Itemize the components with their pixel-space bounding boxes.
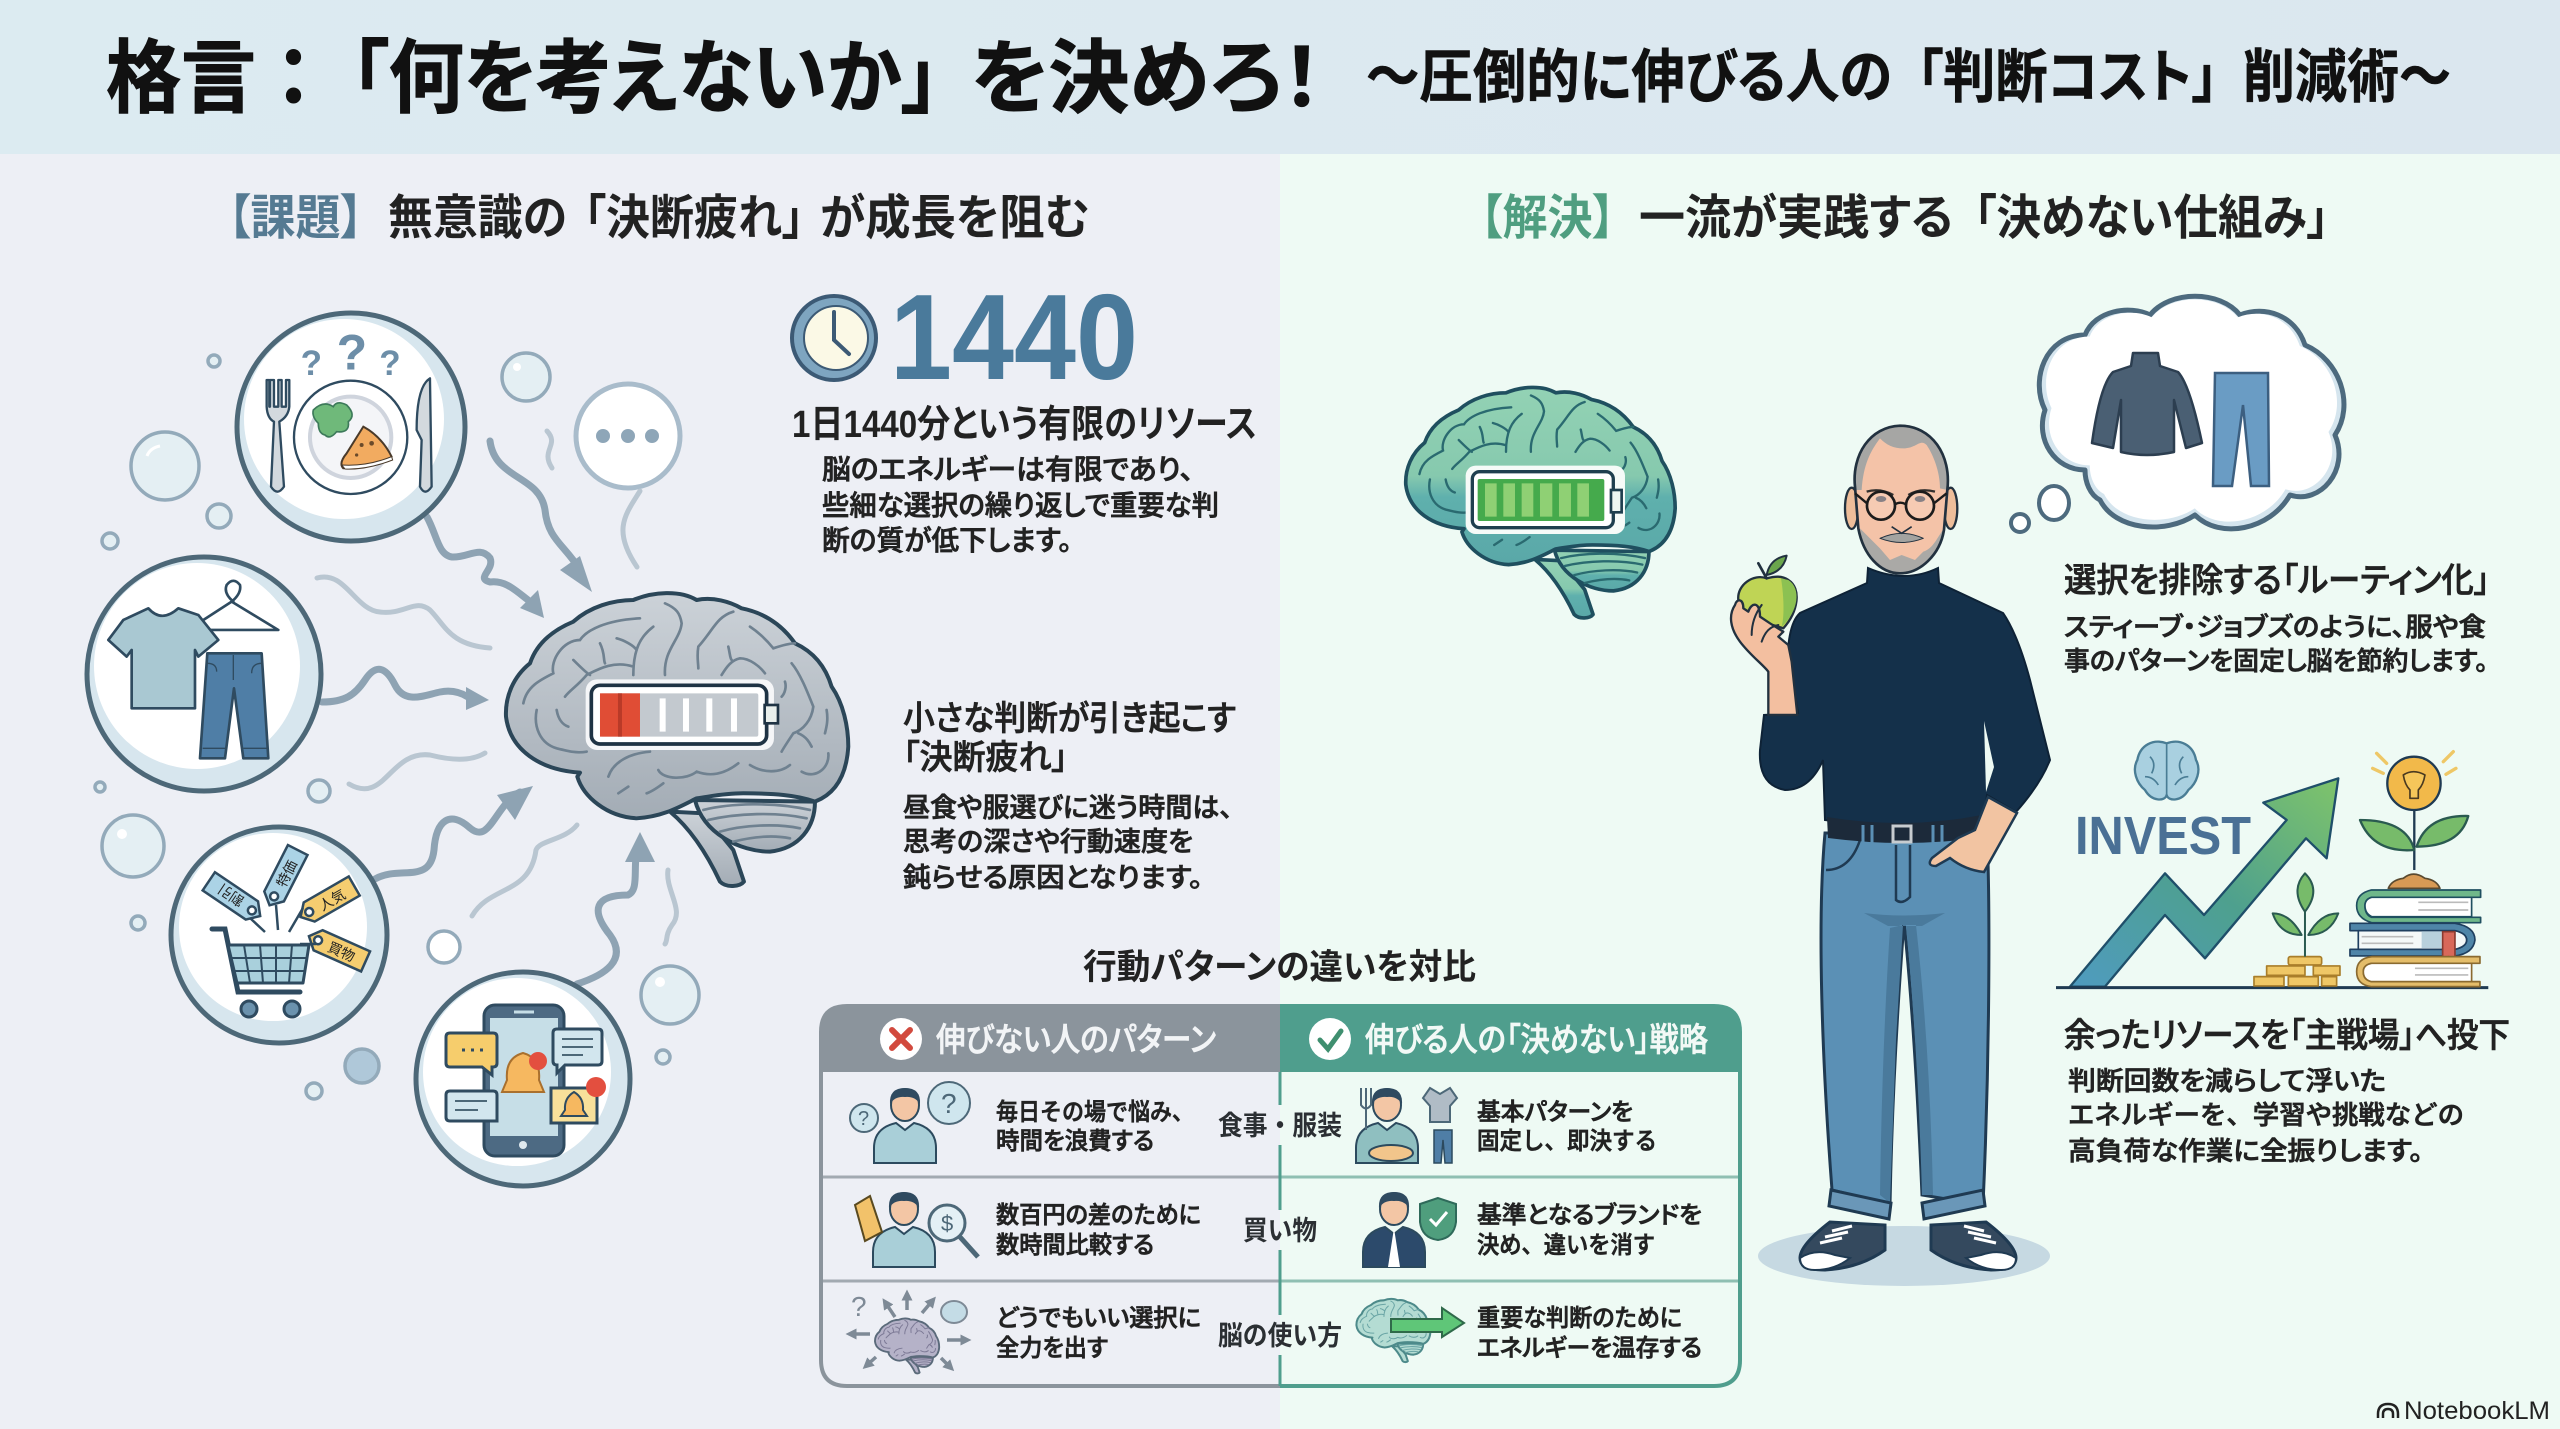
- icon circle: phone notifications: [416, 972, 630, 1186]
- row 1 left text: 時間を浪費する: [996, 1128, 1154, 1155]
- row 2 left text: [996, 1202, 1201, 1259]
- row 2 right text: 基準となるブランドを: [1477, 1201, 1702, 1229]
- subtitle: [1366, 45, 2451, 110]
- row 3 left icon: [850, 1291, 967, 1373]
- text block: decision fatigue: [903, 700, 1236, 893]
- shirt in cloud: [2092, 353, 2202, 455]
- row 2 left text: 数百円の差のために: [996, 1202, 1201, 1229]
- text block: decision fatigue: 思考の深さや行動速度を: [903, 827, 1193, 857]
- icon: charged brain with full battery: [1406, 387, 1675, 618]
- text block: invest resources: 高負荷な作業に全振りします。: [2068, 1136, 2423, 1166]
- section heading: solution: 【解決】: [1480, 192, 1615, 245]
- text block: routine: [2064, 562, 2490, 676]
- row 2 right icon: [1363, 1192, 1456, 1267]
- text block: decision fatigue: 小さな判断が引き起こす: [903, 700, 1236, 738]
- row 3 left text: [996, 1305, 1201, 1362]
- title: 「何を考えないか」: [351, 34, 939, 123]
- row 2 left icon: $: [941, 1211, 953, 1236]
- table header right: 伸びる人の「決めない」戦略: [1365, 1021, 1708, 1058]
- shoes: [1800, 1222, 1885, 1270]
- row 3 left text: どうでもいい選択に: [996, 1305, 1201, 1332]
- price tags: [203, 845, 370, 971]
- low battery: [586, 679, 778, 750]
- icon: tired brain with low battery: [506, 593, 848, 886]
- text block: decision fatigue: 昼食や服選びに迷う時間は、: [903, 793, 1233, 823]
- row labels: 買い物: [1243, 1216, 1317, 1246]
- thought cloud: [2011, 296, 2344, 532]
- decorative bubbles: [95, 353, 699, 1099]
- icon circle: shopping choice: [171, 827, 387, 1043]
- icon: clock: [792, 296, 876, 380]
- jeans in cloud: [2213, 373, 2269, 486]
- text block: limited resource: 脳のエネルギーは有限であり、: [822, 454, 1194, 485]
- small plant: [2273, 873, 2338, 957]
- header band: [0, 0, 2560, 154]
- section heading: problem: が成長を阻む: [820, 192, 1090, 245]
- section heading: problem: 「決断疲れ」: [584, 192, 804, 245]
- table header right: [1280, 1006, 1740, 1072]
- row 3 left icon: ?: [851, 1291, 867, 1322]
- row 1 left icon: ?: [858, 1108, 869, 1130]
- comparison table: [821, 1006, 1740, 1386]
- growth arrow: [2070, 778, 2338, 987]
- watermark: NotebookLM: [2404, 1397, 2550, 1425]
- flower with bulb: [2360, 752, 2468, 888]
- question marks: ?: [379, 344, 401, 383]
- section heading: problem: 無意識の: [388, 192, 567, 245]
- full battery: [1466, 466, 1625, 534]
- price tags: 買物: [325, 939, 357, 965]
- small brain: [2135, 742, 2198, 799]
- subtitle: 「判断コスト」: [1917, 45, 2218, 110]
- icon circle: meal choice: [237, 313, 465, 541]
- row 1 left icon: ?: [941, 1088, 957, 1119]
- jeans: [1821, 833, 1989, 1205]
- table title: 行動パターンの違いを対比: [1083, 948, 1476, 987]
- section heading: solution: [1480, 192, 2329, 245]
- price tags: 割引: [215, 881, 247, 910]
- right column frame: [1280, 1006, 1740, 1386]
- row 2 right text: [1477, 1201, 1702, 1259]
- price tags: 特価: [273, 858, 300, 890]
- text block: routine: 事のパターンを固定し脳を節約します。: [2064, 646, 2488, 676]
- text block: decision fatigue: 「決断疲れ」: [903, 739, 1068, 777]
- subtitle: 削減術～: [2243, 45, 2451, 110]
- row 1 right icon: [1356, 1088, 1457, 1163]
- icon: speech bubble: [576, 384, 680, 567]
- row 1 right text: [1477, 1099, 1657, 1155]
- row labels: 食事・服装: [1218, 1111, 1342, 1141]
- section heading: solution: 「決めない仕組み」: [1974, 192, 2329, 245]
- illustration: invest growth: [2056, 742, 2488, 988]
- wavy arrows into brain: [317, 431, 676, 984]
- background: left panel: [0, 154, 1280, 1429]
- text block: invest resources: 余ったリソースを「主戦場」へ投下: [2064, 1017, 2510, 1055]
- text block: invest resources: 判断回数を減らして浮いた: [2068, 1066, 2386, 1096]
- row 3 right text: エネルギーを温存する: [1477, 1335, 1702, 1362]
- glasses: [1867, 492, 1895, 520]
- text block: invest resources: エネルギーを、学習や挑戦などの: [2068, 1100, 2464, 1130]
- price tags: 人気: [316, 886, 348, 914]
- head: [1845, 426, 1957, 573]
- text block: limited resource: 断の質が低下します。: [822, 525, 1072, 556]
- coins: [2254, 957, 2340, 986]
- title: [106, 34, 1322, 123]
- sweater: [1760, 568, 2050, 826]
- row 3 left text: 全力を出す: [996, 1335, 1108, 1362]
- question marks: ?: [337, 324, 367, 380]
- row 1 left text: 毎日その場で悩み、: [996, 1099, 1194, 1126]
- row 2 right text: 決め、違いを消す: [1477, 1232, 1655, 1259]
- row 2 left text: 数時間比較する: [996, 1232, 1154, 1259]
- row 1 right text: 固定し、即決する: [1477, 1128, 1657, 1155]
- stat number: 1440: [890, 269, 1138, 405]
- icon circle: clothes choice: [87, 557, 321, 791]
- row 3 right icon: [1356, 1299, 1464, 1362]
- illustration: standing man in turtleneck: [1731, 426, 2050, 1286]
- belt: [1827, 815, 1982, 843]
- row 3 right text: [1477, 1305, 1702, 1362]
- apple and hand: [1731, 556, 1797, 715]
- row labels: 脳の使い方: [1218, 1321, 1342, 1351]
- title: を決めろ！: [971, 34, 1322, 123]
- text block: routine: 選択を排除する「ルーティン化」: [2064, 562, 2490, 600]
- books: [2350, 890, 2481, 987]
- text block: decision fatigue: 鈍らせる原因となります。: [903, 863, 1203, 893]
- title: 格言：: [106, 34, 331, 123]
- row labels: [1216, 1105, 1344, 1355]
- table header left: 伸びない人のパターン: [936, 1021, 1216, 1058]
- question marks: ?: [301, 344, 322, 383]
- text block: limited resource: 1日1440分という有限のリソース: [792, 404, 1257, 446]
- table header left: [821, 1006, 1280, 1072]
- question marks: [301, 324, 401, 383]
- text block: routine: スティーブ・ジョブズのように、服や食: [2064, 612, 2486, 642]
- text block: invest resources: [2064, 1017, 2510, 1166]
- row 1 left text: [996, 1099, 1194, 1155]
- section heading: solution: 一流が実践する: [1639, 192, 1953, 245]
- section heading: problem: [228, 192, 1090, 245]
- word INVEST: INVEST: [2075, 806, 2251, 866]
- subtitle: ～圧倒的に伸びる人の: [1366, 45, 1892, 110]
- left column frame: [821, 1006, 1280, 1386]
- row 2 left icon: [855, 1192, 978, 1267]
- row 1 left icon: [850, 1082, 970, 1163]
- hand in pocket: [1930, 797, 2017, 872]
- row 1 right text: 基本パターンを: [1477, 1099, 1633, 1126]
- text block: limited resource: [792, 404, 1257, 556]
- text block: limited resource: 些細な選択の繰り返しで重要な判: [822, 490, 1219, 521]
- section heading: problem: 【課題】: [228, 192, 363, 245]
- background: right panel: [1280, 154, 2560, 1429]
- row 3 right text: 重要な判断のために: [1477, 1305, 1682, 1332]
